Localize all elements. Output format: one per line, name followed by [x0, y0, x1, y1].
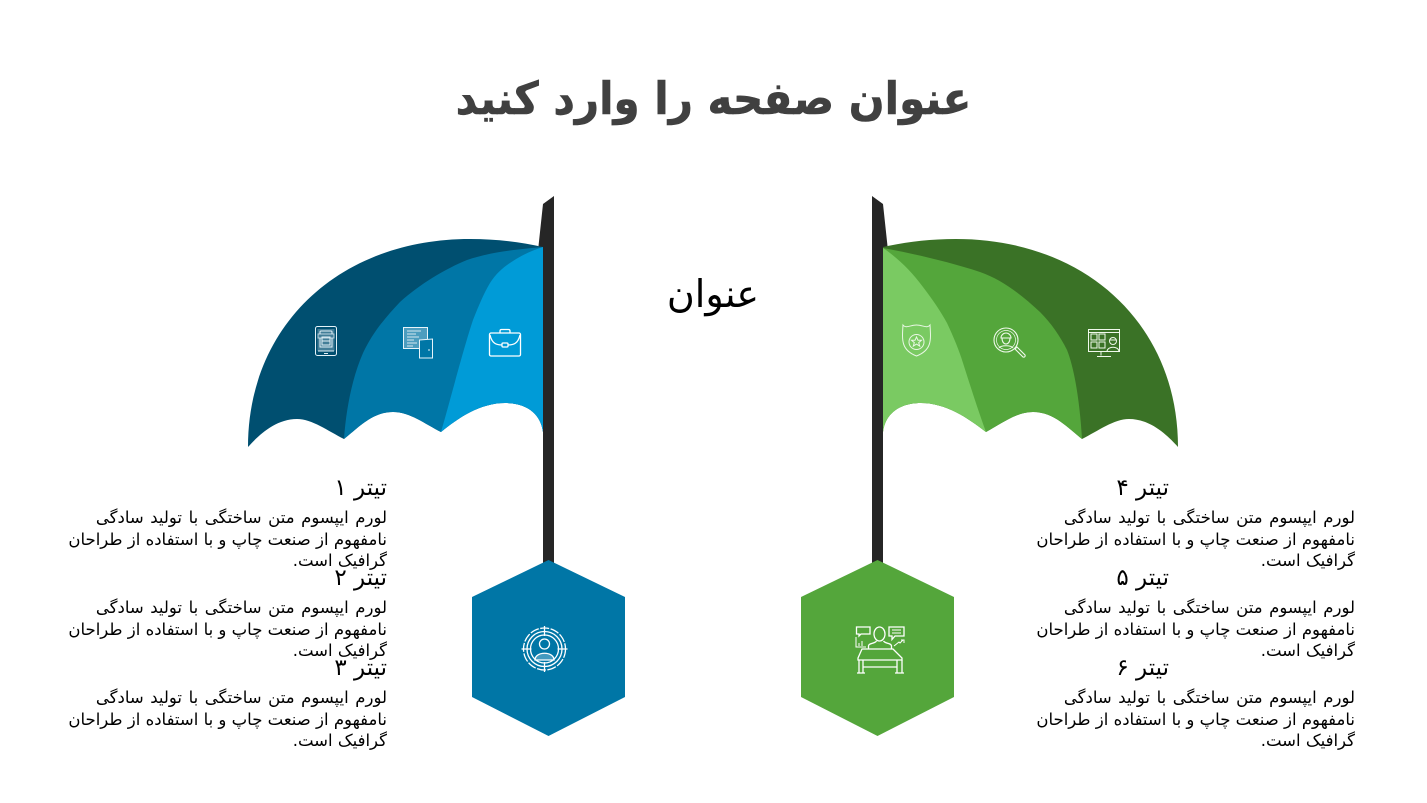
body 3 — [68, 688, 387, 750]
body 1: نامفهوم از صنعت چاپ و با استفاده از طراحان — [68, 530, 387, 549]
heading 4: تیتر ۴ — [1116, 475, 1169, 501]
right pole — [872, 196, 888, 565]
body 6: نامفهوم از صنعت چاپ و با استفاده از طراحان — [1036, 710, 1355, 729]
heading 5: تیتر ۵ — [1116, 565, 1169, 591]
body 4: لورم ایپسوم متن ساختگی با تولید سادگی — [1064, 508, 1355, 527]
text block 3 — [68, 655, 387, 750]
body 4: گرافیک است. — [1261, 551, 1355, 570]
heading 3: تیتر ۳ — [334, 655, 387, 681]
subtitle: عنوان — [667, 272, 759, 316]
body 6: لورم ایپسوم متن ساختگی با تولید سادگی — [1064, 688, 1355, 707]
right canopy middle panel — [883, 248, 1082, 439]
body 3: گرافیک است. — [293, 731, 387, 750]
icon: magnifier with worker — [994, 328, 1025, 357]
left canopy middle panel — [344, 247, 543, 439]
left hexagon — [472, 560, 625, 736]
body 4 — [1036, 508, 1355, 570]
text block 6 — [1036, 655, 1355, 750]
text block 5 — [1036, 565, 1355, 660]
icon: code window and door — [404, 328, 432, 358]
body 5: نامفهوم از صنعت چاپ و با استفاده از طراحان — [1036, 620, 1355, 639]
body 2: گرافیک است. — [293, 641, 387, 660]
heading 1: تیتر ۱ — [334, 475, 387, 501]
body 1: لورم ایپسوم متن ساختگی با تولید سادگی — [96, 508, 387, 527]
left canopy light panel — [441, 247, 543, 432]
body 5 — [1036, 598, 1355, 660]
body 2: نامفهوم از صنعت چاپ و با استفاده از طراحان — [68, 620, 387, 639]
right canopy dark panel — [883, 239, 1178, 447]
icon: target person gear — [522, 626, 568, 672]
icon: police badge — [903, 325, 930, 356]
body 1 — [68, 508, 387, 570]
body 3: لورم ایپسوم متن ساختگی با تولید سادگی — [96, 688, 387, 707]
icon: briefcase — [490, 330, 520, 356]
left canopy dark panel — [248, 239, 543, 447]
heading 6: تیتر ۶ — [1116, 655, 1169, 681]
body 6 — [1036, 688, 1355, 750]
icon: monitor video call — [1088, 330, 1120, 356]
body 5: گرافیک است. — [1261, 641, 1355, 660]
title: عنوان صفحه را وارد کنید — [456, 72, 971, 125]
text block 2 — [68, 565, 387, 660]
right umbrella — [872, 196, 1178, 565]
right canopy light panel — [883, 248, 986, 432]
body 2 — [68, 598, 387, 660]
icon: tablet — [316, 326, 336, 356]
body 5: لورم ایپسوم متن ساختگی با تولید سادگی — [1064, 598, 1355, 617]
body 1: گرافیک است. — [293, 551, 387, 570]
heading 2: تیتر ۲ — [334, 565, 387, 591]
body 4: نامفهوم از صنعت چاپ و با استفاده از طراحان — [1036, 530, 1355, 549]
text block 1 — [68, 475, 387, 570]
body 6: گرافیک است. — [1261, 731, 1355, 750]
left umbrella — [248, 196, 554, 565]
body 2: لورم ایپسوم متن ساختگی با تولید سادگی — [96, 598, 387, 617]
right hexagon — [801, 560, 954, 736]
left pole — [538, 196, 554, 565]
text block 4 — [1036, 475, 1355, 570]
icon: person at desk — [856, 627, 904, 673]
body 3: نامفهوم از صنعت چاپ و با استفاده از طراحان — [68, 710, 387, 729]
